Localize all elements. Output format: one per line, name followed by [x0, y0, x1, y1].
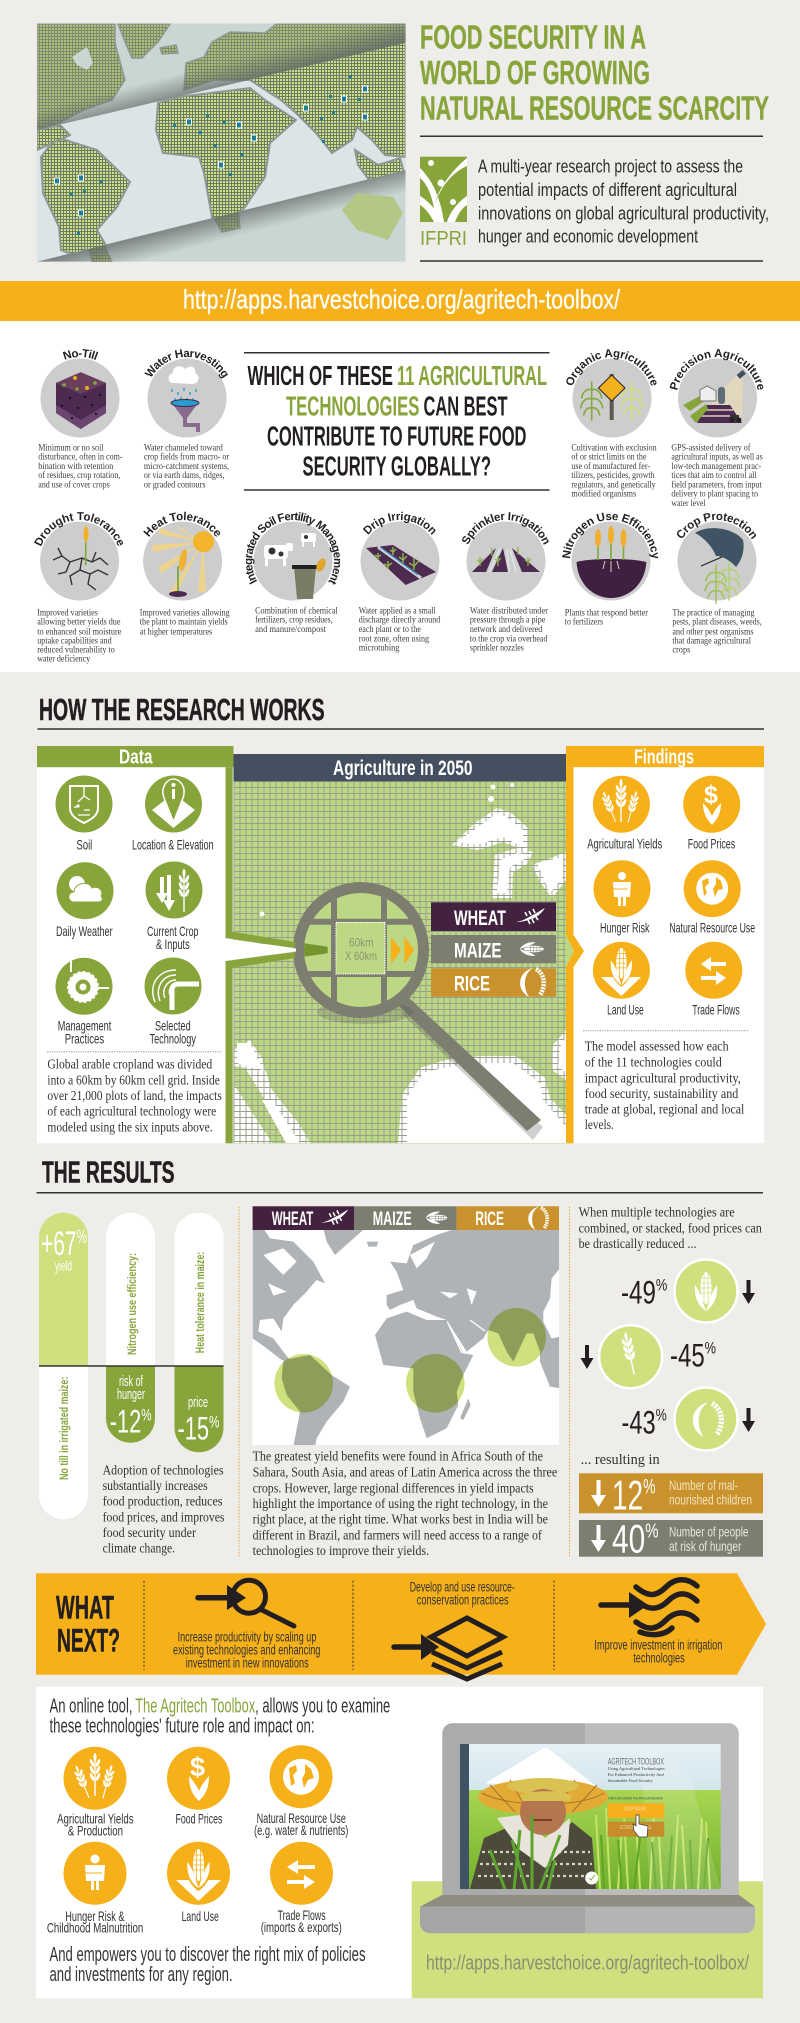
tech: Organic Agriculture: modified organisms — [571, 489, 636, 500]
panel: agritech toolbox: Childhood Malnutrition — [47, 1920, 143, 1936]
icon: food prices: $ — [190, 1752, 205, 1782]
text block: adoption of technologies: climate change. — [103, 1541, 175, 1556]
icon: layered practices with arrow — [394, 1618, 503, 1679]
crop legend — [253, 1206, 559, 1230]
map header — [234, 754, 566, 781]
rice price reduction — [622, 1388, 755, 1450]
tech: No-Till: No-Till — [62, 349, 98, 360]
tech: Precision Agriculture — [670, 349, 764, 509]
tech: No-Till: bination with retention — [38, 461, 113, 472]
hero world map — [37, 24, 406, 262]
Hudson Bay — [72, 47, 93, 70]
tech: Water Harvesting: micro-catchment systems, — [144, 461, 229, 472]
text block: adoption of technologies: substantially increases — [103, 1478, 208, 1493]
panel: findings: Agricultural Yields — [587, 835, 662, 851]
intro text: hunger and economic development — [478, 226, 698, 247]
what next arrow banner: technologies — [633, 1651, 685, 1666]
headline question: SECURITY GLOBALLY? — [302, 451, 491, 482]
tech: Sprinkler Irrigation: pressure through a pipe — [470, 615, 545, 626]
what next arrow banner: conservation practices — [417, 1592, 509, 1607]
stat: malnourished children: 12 — [612, 1471, 659, 1518]
tech: Drip Irrigation: microtubing — [359, 642, 400, 653]
text block: data description: Global arable cropland was divided — [47, 1057, 212, 1072]
tech: Drip Irrigation: root zone, often using — [359, 633, 429, 644]
text block: yield benefits: technologies to improve their yields. — [253, 1543, 429, 1558]
tech: Drought Tolerance: allowing better yields due — [37, 617, 120, 628]
text block: data description: modeled using the six inputs above. — [47, 1119, 213, 1134]
tech: Heat Tolerance: at higher temperatures — [140, 626, 212, 637]
text block: yield benefits: different in Brazil, and farmers will need access to a range of — [253, 1527, 542, 1542]
panel: data: Current Crop — [147, 923, 199, 939]
tech: Precision Agriculture: tices that aim to control all — [671, 470, 757, 481]
icon: food prices — [167, 1747, 230, 1810]
bar: heat tolerance: price — [188, 1394, 208, 1411]
bar: no till — [39, 1213, 88, 1519]
tech: Crop Protection: and other pest organisms — [672, 626, 754, 637]
laptop screen photo — [460, 1744, 721, 1889]
headline question: CAN BEST — [424, 391, 508, 422]
text block: data description: of each agricultural technology were — [47, 1104, 216, 1119]
intro text: , allows you to examine — [255, 1695, 390, 1717]
icon: daily weather — [56, 862, 114, 919]
panel: agritech toolbox: (imports & exports) — [261, 1919, 342, 1935]
tech: Sprinkler Irrigation: Sprinkler Irrigation — [462, 512, 549, 545]
panel: stacked technologies: be drastically reduced ... — [579, 1236, 696, 1251]
heading: the results: THE RESULTS — [42, 1154, 174, 1189]
tech: Drip Irrigation — [358, 512, 440, 653]
icon: trade flows — [685, 942, 742, 999]
open water — [237, 783, 566, 1143]
panel: data: Daily Weather — [56, 923, 113, 939]
headline question: WHICH OF THESE — [248, 360, 393, 391]
tech: Precision Agriculture: Precision Agriculture — [670, 349, 764, 390]
magnifying glass: 60km — [349, 936, 374, 950]
panel: findings: Hunger Risk — [600, 920, 650, 936]
tech: Drought Tolerance: uptake capabilities and — [37, 635, 112, 646]
title: WORLD OF GROWING — [420, 54, 650, 91]
headline question: CONTRIBUTE TO FUTURE FOOD — [267, 421, 526, 452]
tech: Sprinkler Irrigation: network and delivered — [470, 624, 542, 635]
crop legend: RICE — [475, 1209, 504, 1230]
bar: heat tolerance: % — [209, 1412, 219, 1431]
tech: Water Harvesting: crop fields from macro- or — [144, 452, 230, 463]
tech: Sprinkler Irrigation — [462, 512, 549, 653]
bar: heat tolerance: -15 — [178, 1410, 224, 1446]
continents in band — [37, 43, 406, 254]
bar: nitrogen use efficiency: risk of — [119, 1373, 143, 1390]
laptop screen photo: START EXPLORING THE APPLICATION NOW — [608, 1796, 663, 1800]
icon: location and elevation — [145, 776, 202, 832]
tech: Nitrogen Use Efficiency: Plants that respond better — [565, 608, 649, 619]
laptop screen photo: ECONOMIC MODEL — [620, 1825, 652, 1831]
IFPRI logo — [420, 157, 467, 250]
heading: how the research works: HOW THE RESEARCH WORKS — [39, 692, 324, 727]
text block: data description: over 21,000 plots of land, the impacts — [47, 1088, 222, 1103]
text block: yield benefits: Sahara, South Asia, and areas of Latin America across the three — [253, 1464, 557, 1479]
stat: people at risk of hunger: 40 — [612, 1518, 656, 1562]
what next arrow banner: existing technologies and enhancing — [173, 1643, 320, 1658]
URL banner — [0, 281, 800, 321]
text block: yield benefits: crops. However, large regional differences in yield impacts — [253, 1480, 534, 1495]
rice price reduction: % — [656, 1405, 667, 1424]
bar: nitrogen use efficiency: -12 — [110, 1404, 156, 1440]
icon: water waves with arrow — [601, 1580, 697, 1635]
icon: hunger risk and childhood malnutrition — [64, 1842, 126, 1905]
green footer block — [412, 1881, 763, 1998]
panel: stacked technologies: When multiple technologies are — [579, 1205, 735, 1220]
text block: yield benefits — [253, 1449, 557, 1558]
tech: Organic Agriculture: of or strict limits on the — [571, 452, 646, 463]
continents: muted grid — [37, 24, 406, 262]
closing text — [50, 1944, 366, 1986]
laptop screen photo: For Enhanced Productivity And — [608, 1772, 664, 1777]
title: FOOD SECURITY IN A — [420, 18, 646, 55]
tech: Organic Agriculture — [566, 349, 657, 500]
panel: data: & Inputs — [156, 936, 190, 952]
what next arrow banner: Improve investment in irrigation — [594, 1638, 722, 1653]
icon: management practices — [56, 958, 112, 1015]
tech: No-Till: disturbance, often in com- — [38, 452, 122, 463]
stat: people at risk of hunger: % — [645, 1521, 659, 1543]
intro text — [478, 155, 769, 247]
intro text — [50, 1695, 390, 1737]
maize price reduction: % — [656, 1275, 667, 1294]
tech: Crop Protection: Crop Protection — [677, 513, 756, 540]
tech: Drip Irrigation: each plant or to the — [359, 624, 421, 635]
icon: land use — [593, 942, 650, 999]
maize price reduction — [621, 1260, 755, 1322]
text block: data description: into a 60km by 60km cell grid. Inside — [47, 1072, 220, 1087]
panel: data: Technology — [150, 1030, 196, 1046]
tech: Drought Tolerance: Drought Tolerance — [34, 512, 123, 546]
URL banner: http://apps.harvestchoice.org/agritech-toolbox/ — [183, 284, 620, 314]
wheat price reduction: % — [705, 1339, 716, 1358]
headline question: TECHNOLOGIES — [286, 391, 419, 422]
icon: agricultural yields — [593, 776, 650, 833]
stat: malnourished children: % — [643, 1475, 656, 1498]
tech: No-Till: Minimum or no soil — [38, 443, 104, 454]
text block: findings description: impact agricultural productivity, — [585, 1070, 741, 1085]
icon: food prices — [683, 776, 740, 833]
tech: Crop Protection: that damage agricultural — [672, 635, 751, 646]
stat: malnourished children: Number of mal- — [669, 1477, 738, 1493]
tech: No-Till: and use of cover crops — [38, 479, 110, 490]
crop legend: WHEAT — [272, 1209, 314, 1230]
intro text: these technologies' future role and impact on: — [50, 1715, 314, 1737]
laptop screen photo: AGRITECH TOOLBOX — [608, 1756, 664, 1766]
panel: data: Practices — [65, 1030, 104, 1046]
laptop screen photo: Using Agricultural Technologies — [608, 1766, 665, 1771]
text block: findings description: The model assessed how each — [585, 1039, 729, 1054]
headline question: 11 AGRICULTURAL — [397, 360, 547, 391]
text block: adoption of technologies: food production, reduces — [103, 1494, 222, 1509]
label: maize: MAIZE — [454, 939, 502, 962]
bar: no till: +67 — [41, 1225, 99, 1263]
tech: Heat Tolerance: the plant to maintain yields — [140, 617, 228, 628]
bar: nitrogen use efficiency: hunger — [117, 1386, 145, 1403]
tech: Nitrogen Use Efficiency: to fertilizers — [565, 617, 603, 628]
tech: Nitrogen Use Efficiency — [562, 512, 658, 628]
icon: selected technology — [144, 958, 202, 1014]
closing text: And empowers you to discover the right mix of policies — [50, 1944, 366, 1966]
highlight circles — [274, 1308, 546, 1413]
tech: Integrated Soil Fertility Management: fertilizers, crop residues, — [255, 615, 333, 626]
technologies panel — [0, 321, 800, 672]
tech: Drip Irrigation: Water applied as a small — [359, 606, 436, 617]
intro text: The Agritech Toolbox — [135, 1695, 255, 1717]
magnifying glass — [298, 888, 543, 1140]
panel: agritech toolbox: Hunger Risk & — [65, 1908, 125, 1924]
tech: Drought Tolerance: to enhanced soil moisture — [37, 626, 121, 637]
tech: Drip Irrigation: Drip Irrigation — [362, 512, 436, 535]
panel: data — [37, 746, 296, 1143]
tech: Nitrogen Use Efficiency: Nitrogen Use Efficiency — [562, 512, 658, 558]
bar: nitrogen use efficiency — [106, 1213, 155, 1443]
tech: Sprinkler Irrigation: sprinkler nozzles — [470, 642, 524, 653]
label: wheat: WHEAT — [454, 907, 506, 930]
text block: findings description — [585, 1039, 745, 1132]
title — [420, 18, 769, 126]
text block: yield benefits: right place, at the right time. What works best in India will be — [253, 1512, 548, 1527]
tech: Heat Tolerance — [140, 512, 230, 637]
Australia — [342, 193, 403, 240]
icon: trade flows — [270, 1842, 333, 1905]
tech: Drought Tolerance: reduced vulnerability to — [37, 644, 115, 655]
panel: findings: Land Use — [607, 1002, 644, 1018]
bar: nitrogen use efficiency: Nitrogen use efficiency: — [127, 1253, 139, 1355]
icon: natural resource use — [684, 860, 741, 917]
text block: findings description: levels. — [585, 1117, 614, 1132]
tech: Organic Agriculture: Cultivation with exclusion — [571, 443, 657, 454]
pointer to magnifier — [225, 932, 296, 968]
laptop screen photo: CROP MODEL — [624, 1806, 647, 1812]
panel: data: Location & Elevation — [132, 836, 214, 852]
bar chart: yield, hunger and price impacts — [39, 1213, 224, 1519]
what next arrow banner: Increase productivity by scaling up — [178, 1630, 316, 1645]
tech: Integrated Soil Fertility Management — [246, 512, 340, 635]
bar: no till: yield — [55, 1258, 72, 1274]
tech: Organic Agriculture: regulators, and genetically — [571, 479, 656, 490]
bar: no till: No till in irrigated maize: — [59, 1377, 71, 1480]
stat: people at risk of hunger: Number of people — [669, 1524, 749, 1540]
panel: agritech toolbox: Trade Flows — [278, 1907, 326, 1923]
label: rice: RICE — [454, 973, 490, 996]
panel: findings — [566, 746, 764, 1143]
tech: Integrated Soil Fertility Management: Combination of chemical — [255, 606, 338, 617]
text block: findings description: trade at global, regional and local — [585, 1102, 745, 1117]
icon: agricultural yields and production — [64, 1747, 126, 1810]
tech: Integrated Soil Fertility Management: Integrated Soil Fertility Management — [246, 512, 340, 585]
text block: adoption of technologies: food prices, and improves — [103, 1509, 224, 1524]
tech: No-Till: of residues, crop rotation, — [38, 470, 120, 481]
text block: adoption of technologies — [103, 1462, 224, 1556]
panel: agritech toolbox: & Production — [68, 1823, 123, 1839]
what next arrow banner: Develop and use resource- — [410, 1579, 515, 1594]
tech: Precision Agriculture: agricultural inputs, as well as — [671, 452, 763, 463]
tech: Organic Agriculture: tilizers, pesticides, growth — [571, 470, 655, 481]
stat: malnourished children: nourished children — [669, 1491, 752, 1507]
panel: data: Selected — [155, 1017, 191, 1033]
bar: heat tolerance — [174, 1213, 224, 1452]
headline question — [244, 353, 550, 490]
magnifying glass: X 60km — [345, 949, 377, 963]
tech: Water Harvesting: Water Harvesting — [144, 349, 228, 378]
panel: stacked technologies: ... resulting in — [581, 1452, 660, 1468]
tech: Organic Agriculture: use of manufactured fer- — [571, 461, 650, 472]
tech: Crop Protection: crops — [672, 644, 691, 655]
bar: no till: % — [77, 1227, 87, 1248]
tech: Heat Tolerance: Heat Tolerance — [143, 512, 220, 537]
green Baja peninsula and coast — [234, 1066, 290, 1143]
icon: current crop and inputs — [146, 862, 202, 918]
tech: Heat Tolerance: Improved varieties allowing — [140, 608, 230, 619]
research site markers — [54, 86, 368, 216]
intro text: potential impacts of different agricultural — [478, 179, 737, 200]
stat: people at risk of hunger: at risk of hunger — [669, 1538, 742, 1554]
tech: Drought Tolerance: Improved varieties — [37, 608, 98, 619]
tech: Integrated Soil Fertility Management: and manure/compost — [255, 624, 326, 635]
panel: stacked technologies: combined, or stacked, food prices can — [579, 1220, 762, 1235]
text block: yield benefits: The greatest yield benefits were found in Africa South of the — [253, 1449, 543, 1464]
map outlines — [253, 1228, 560, 1447]
wheat price reduction — [580, 1325, 716, 1388]
icon: natural resource use — [270, 1745, 332, 1808]
crop labels — [431, 902, 556, 997]
tech: Precision Agriculture: field parameters, from input — [671, 479, 762, 490]
tech: Precision Agriculture: water level — [671, 498, 706, 509]
tech: Sprinkler Irrigation: to the crop via overhead — [470, 633, 548, 644]
world map of yield benefits — [253, 1206, 560, 1447]
panel: agritech toolbox: Land Use — [182, 1908, 219, 1924]
heading: what next: NEXT? — [57, 1622, 120, 1658]
heading: what next: WHAT — [56, 1590, 114, 1626]
text block: data description — [47, 1057, 222, 1134]
panel: agritech toolbox: Food Prices — [176, 1811, 222, 1827]
panel: agritech toolbox: Natural Resource Use — [257, 1810, 346, 1826]
closing text: and investments for any region. — [50, 1964, 233, 1986]
IFPRI logo: IFPRI — [420, 228, 467, 250]
panel: data: Data — [119, 747, 153, 769]
laptop screen photo: Sustainable Food Security — [608, 1778, 653, 1783]
panel: agritech toolbox — [36, 1687, 763, 1998]
panel: data: Management — [58, 1017, 111, 1033]
light diagonal band — [37, 43, 406, 262]
tech: Crop Protection — [672, 513, 762, 655]
tech: Sprinkler Irrigation: Water distributed under — [470, 606, 549, 617]
rice price reduction: -43 — [622, 1404, 668, 1440]
chevron pointer — [566, 935, 584, 967]
tech: Water Harvesting: or graded contours — [144, 479, 206, 490]
text block: findings description: food security, sustainability and — [585, 1086, 739, 1101]
panel: findings: Findings — [634, 746, 694, 768]
icon: magnifier with arrow — [198, 1580, 294, 1626]
text block: adoption of technologies: food security under — [103, 1525, 196, 1540]
text block: adoption of technologies: Adoption of technologies — [103, 1462, 224, 1477]
tech: Water Harvesting: or via earth dams, ridges, — [144, 470, 224, 481]
tech: Water Harvesting: Water channeled toward — [144, 443, 223, 454]
bar: nitrogen use efficiency: % — [141, 1406, 152, 1425]
panel: data: Soil — [76, 836, 92, 852]
tech: Organic Agriculture: Organic Agriculture — [566, 349, 656, 386]
icon: soil — [56, 776, 112, 832]
panel: findings: Food Prices — [688, 835, 735, 851]
crop legend: MAIZE — [373, 1209, 412, 1230]
grid lines — [234, 781, 566, 1143]
tech: Precision Agriculture: low-tech management prac- — [671, 461, 761, 472]
icon: land use — [167, 1842, 230, 1905]
tech: Precision Agriculture: delivery to plant spacing to — [671, 489, 758, 500]
tech: Drip Irrigation: discharge directly around — [359, 615, 440, 626]
laptop — [420, 1723, 755, 1933]
stat: people at risk of hunger — [579, 1518, 763, 1562]
tech: Drought Tolerance — [34, 512, 123, 665]
text block: yield benefits: highlight the importance of using the right technology, in the — [253, 1496, 548, 1511]
panel: agriculture in 2050 map — [234, 754, 566, 1143]
panel: agritech toolbox: (e.g. water & nutrients) — [254, 1822, 348, 1838]
icon: food prices: $ — [704, 781, 718, 809]
panel: stacked technologies — [579, 1205, 763, 1562]
map header: Agriculture in 2050 — [333, 757, 472, 780]
tech: No-Till — [38, 349, 122, 490]
what next arrow banner: investment in new innovations — [186, 1656, 309, 1671]
panel: findings: Trade Flows — [692, 1002, 740, 1018]
heading: what next — [56, 1590, 120, 1658]
white coast fringes beneath the grid — [234, 808, 566, 1143]
maize price reduction: -49 — [621, 1274, 667, 1310]
what next arrow banner — [36, 1573, 766, 1679]
icon: hunger risk — [594, 860, 650, 917]
band shadows — [37, 24, 406, 130]
tech: Crop Protection: The practice of managing — [672, 608, 755, 619]
stat: malnourished children — [579, 1471, 763, 1518]
bar: heat tolerance: Heat tolerance in maize: — [195, 1252, 207, 1353]
tech: Crop Protection: pests, plant diseases, weeds, — [672, 617, 762, 628]
tech: Precision Agriculture: GPS-assisted delivery of — [671, 443, 751, 454]
tech: Drought Tolerance: water deficiency — [37, 654, 90, 665]
wheat price reduction: -45 — [670, 1338, 716, 1374]
intro text: An online tool, — [50, 1695, 132, 1717]
panel: agritech toolbox: Agricultural Yields — [57, 1811, 134, 1827]
text block: findings description: of the 11 technologies could — [585, 1054, 722, 1069]
tech: Water Harvesting — [144, 349, 230, 490]
